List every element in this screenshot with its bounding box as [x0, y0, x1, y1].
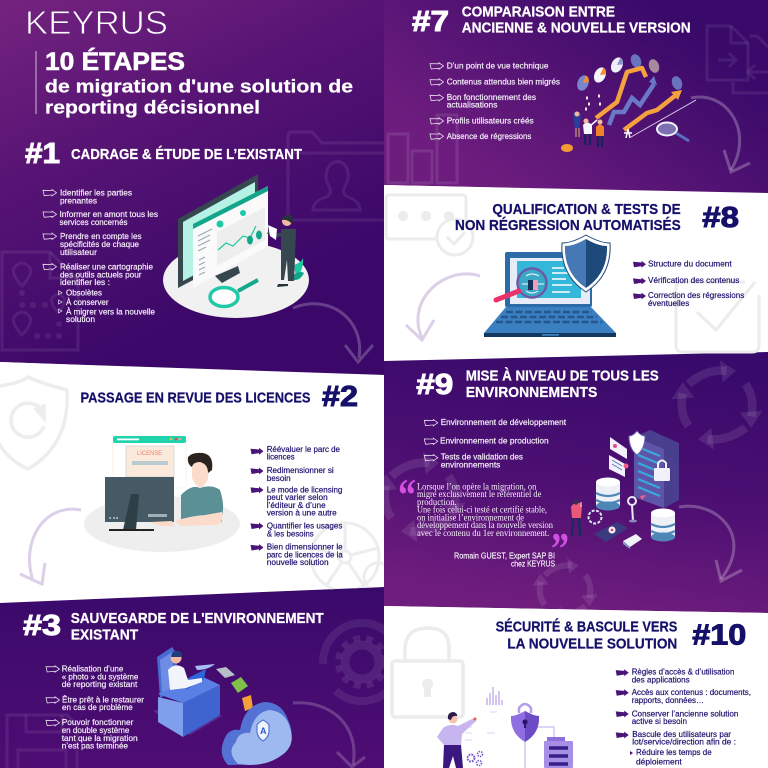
illustration: license review [84, 436, 240, 552]
bullet list step 1: spécificités de chaque [60, 239, 139, 249]
background icon: big checkbox [676, 282, 759, 352]
illustration: backup to cloud [153, 647, 292, 765]
quote block: développement dans la nouvelle version [417, 520, 553, 530]
quote block: avec le contenu du 1er environnement. [417, 528, 549, 538]
bullet list step 2: nouvelle solution [267, 557, 329, 567]
bullet list step 8: Structure du document [648, 258, 732, 268]
step number 2: #2 [322, 381, 358, 413]
title block [36, 47, 353, 118]
bullet list step 3: en cas de problème [62, 702, 133, 712]
bullet list step 10: rapports, données… [632, 695, 704, 705]
heading step 1: CADRAGE & ÉTUDE DE L’EXISTANT [71, 146, 302, 163]
bullet list step 10: Conserver l’ancienne solution [632, 708, 739, 718]
panel: step 10 background [384, 606, 768, 768]
background icon: gears [311, 523, 392, 591]
background arrow: step 2 to 3 [20, 509, 81, 584]
bullet list step 3: Réalisation d’une [62, 664, 124, 674]
bullet list step 2: Le mode de licensing [267, 484, 343, 494]
bullet list step 7: Profils utilisateurs créés [447, 115, 534, 125]
bullet list step 3: Être prêt à le restaurer [62, 694, 144, 704]
background icon: floppy disk [7, 715, 77, 768]
background arrow: step 9 to 10 [679, 506, 742, 581]
bullet list step 10 [616, 666, 751, 766]
bullet list step 3: en double système [62, 725, 130, 735]
background arrow: step 3 [293, 703, 365, 767]
panel: step 2 background [0, 362, 384, 603]
bullet list step 7: Absence de régressions [447, 131, 531, 141]
heading step 10: SÉCURITÉ & BASCULE VERS [496, 619, 678, 636]
bullet list step 9: Tests de validation des [441, 452, 523, 462]
quote block [398, 469, 569, 574]
background icon: speech box with check [386, 195, 473, 255]
bullet list step 1: Réaliser une cartographie [60, 262, 153, 272]
bullet list step 9: Environnement de développement [441, 417, 567, 427]
background arrow: step 1 to 2 [293, 304, 373, 362]
bullet list step 1: des outils actuels pour [60, 269, 142, 279]
bullet list step 2: peut varier selon [267, 492, 328, 502]
heading step 7 [462, 4, 691, 37]
illustration: laptop with shield and bug [484, 235, 616, 337]
quote block: Une fois celui-ci testé et certifié stable, [417, 505, 547, 515]
bullet list step 1: utilisateur [60, 247, 97, 257]
illustration: backup to cloud: A [260, 726, 267, 736]
background icon: bar chart [388, 115, 457, 183]
step number 9: #9 [416, 369, 453, 401]
illustration: analyst at dashboard [163, 174, 309, 318]
quote block: migre exclusivement le référentiel de [417, 489, 541, 499]
panel: step 7 background [384, 0, 768, 194]
heading step 3: EXISTANT [71, 628, 138, 644]
background arrow: step 8 to 9 [406, 274, 480, 340]
step number 7: #7 [412, 6, 449, 38]
title block: reporting décisionnel [45, 96, 260, 118]
quote block: production. [417, 497, 457, 507]
bullet list step 9: environnements [441, 459, 500, 469]
heading step 9 [466, 368, 659, 401]
bullet list step 9 [424, 417, 567, 469]
bullet list step 10: déploiement [636, 756, 682, 766]
heading step 10: LA NOUVELLE SOLUTION [507, 636, 677, 652]
quote author [454, 550, 555, 568]
bullet list step 1: identifier les : [60, 277, 110, 287]
heading step 8: NON RÉGRESSION AUTOMATISÉS [455, 217, 681, 234]
bullet list step 10: active si besoin [632, 716, 687, 726]
panel: step 1 background [0, 0, 384, 376]
panel: step 8 background [384, 185, 768, 361]
step number 3: #3 [23, 610, 61, 642]
bullet list step 9: Environnement de production [440, 436, 549, 446]
heading step 3: SAUVEGARDE DE L'ENVIRONNEMENT [71, 611, 324, 627]
bullet list step 1 [43, 188, 158, 324]
bullet list step 1: Prendre en compte les [60, 231, 142, 241]
heading step 7: COMPARAISON ENTRE [462, 4, 615, 20]
panel: step 3 background [0, 587, 384, 768]
background icon: map document [2, 252, 78, 350]
bullet list step 7: D’un point de vue technique [447, 60, 549, 70]
background icon: rotating arrows left [374, 452, 466, 542]
heading step 8: QUALIFICATION & TESTS DE [492, 202, 681, 218]
background icon: shield with refresh [0, 377, 67, 469]
quote block: ” [551, 523, 569, 574]
step number 8: #8 [702, 202, 739, 234]
title block: 10 ÉTAPES [45, 47, 185, 76]
bullet list step 10: Réduire les temps de [636, 747, 712, 757]
title block: de migration d'une solution de [45, 76, 353, 96]
step number 1: #1 [25, 138, 60, 170]
bullet list step 2: licences [267, 452, 295, 462]
bullet list step 1: prenantes [60, 195, 97, 205]
bullet list step 2 [250, 444, 343, 567]
bullet list step 2: Redimensionner si [267, 465, 334, 475]
background arrow: step 7 to 8 [691, 97, 750, 172]
background icon: documents [707, 26, 768, 93]
heading step 3 [71, 611, 324, 644]
quote block: “ [398, 469, 416, 520]
background icon: rotating arrows bottom [532, 558, 598, 622]
bullet list step 2: version à une autre [267, 508, 337, 518]
bullet list step 2: l’éditeur & d’une [267, 500, 326, 510]
bullet list step 3: n’est pas terminée [62, 741, 128, 751]
quote block: Lorsque l’on opère la migration, on [417, 482, 537, 492]
bullet list step 1: Identifier les parties [60, 188, 132, 198]
bullet list step 8: éventuelles [648, 298, 689, 308]
illustration: comparison charts [561, 53, 696, 152]
illustration: server and environments [571, 430, 679, 549]
bullet list step 1: services concernés [60, 217, 128, 227]
bullet list step 2: Bien dimensionner le [267, 542, 343, 552]
background icon: padlock [392, 628, 463, 717]
bullet list step 2: parc de licences de la [267, 549, 343, 559]
bullet list step 3 [46, 664, 144, 751]
bullet list step 8: Correction des régressions [648, 290, 744, 300]
bullet list step 7 [430, 60, 560, 141]
bullet list step 10: Règles d’accès & d’utilisation [632, 666, 735, 676]
illustration: security and person [437, 687, 573, 768]
bullet list step 3: de reporting existant [62, 679, 138, 689]
background icon: gear with arrows [323, 623, 401, 701]
bullet list step 2: Réévaluer le parc de [267, 444, 340, 454]
bullet list step 8: Vérification des contenus [648, 275, 739, 285]
heading step 7: ANCIENNE & NOUVELLE VERSION [462, 21, 691, 37]
bullet list step 3: « photo » du système [62, 671, 139, 681]
bullet list step 7: Bon fonctionnement des [447, 92, 536, 102]
quote author: chez KEYRUS [511, 558, 555, 568]
bullet list step 2: Quantifier les usages [267, 520, 342, 530]
quote author: Romain GUEST, Expert SAP BI [454, 550, 555, 560]
bullet list step 8 [633, 258, 744, 308]
step number 10: #10 [692, 619, 746, 651]
bullet list step 10: des applications [632, 674, 690, 684]
bullet list step 1: À migrer vers la nouvelle [66, 306, 155, 316]
bullet list step 1: Obsolètes [66, 288, 102, 298]
bullet list step 7: Contenus attendus bien migrés [447, 76, 560, 86]
bullet list step 10: Bascule des utilisateurs par [632, 729, 731, 739]
heading step 9: MISE À NIVEAU DE TOUS LES [466, 368, 659, 385]
heading step 10 [496, 619, 678, 652]
bullet list step 7: actualisations [447, 100, 497, 110]
quote block: on initialise l’environnement de [417, 512, 524, 522]
bullet list step 1: À conserver [66, 297, 109, 307]
bullet list step 10: lot/service/direction afin de : [632, 736, 736, 746]
bullet list step 2: & les besoins [267, 528, 314, 538]
background icon: rotating arrows top right [671, 360, 763, 450]
logo: KEYRUS [25, 4, 168, 41]
heading step 8 [455, 202, 681, 234]
bullet list step 1: solution [66, 314, 95, 324]
heading step 9: ENVIRONNEMENTS [466, 385, 598, 401]
bullet list step 10: Accès aux contenus : documents, [632, 687, 751, 697]
bullet list step 2: besoin [267, 473, 291, 483]
illustration: license review: LICENSE [137, 450, 163, 457]
bullet list step 3: tant que la migration [62, 733, 138, 743]
background icon: folder with user [288, 132, 384, 220]
bullet list step 1: Informer en amont tous les [60, 209, 158, 219]
bullet list step 3: Pouvoir fonctionner [62, 717, 134, 727]
panel: step 9 background [384, 352, 768, 613]
heading step 2: PASSAGE EN REVUE DES LICENCES [80, 391, 311, 407]
